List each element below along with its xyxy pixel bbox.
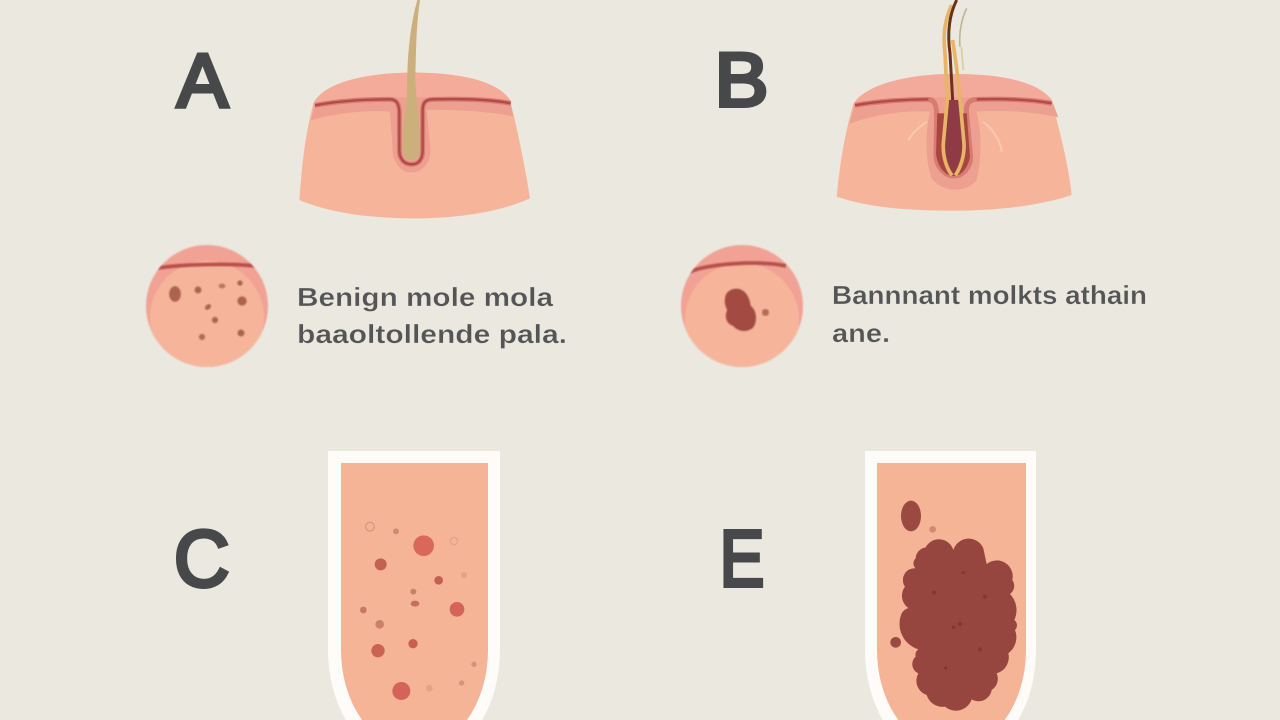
text: benign description	[297, 282, 567, 349]
illustration: skin panel E with large irregular lesion	[865, 451, 1036, 720]
letter E: E	[720, 514, 764, 603]
text: malignant description	[832, 280, 1147, 348]
text: malignant description: ane.	[832, 318, 890, 348]
letter C: C	[174, 514, 230, 603]
illustration: skin panel C with scattered spots	[328, 451, 500, 720]
illustration: skin cross-section B with dark hair	[837, 0, 1072, 211]
icon: benign mole circle	[146, 245, 268, 375]
text: benign description: baaoltollende pala.	[297, 319, 567, 349]
letter B: B	[714, 38, 768, 123]
text: malignant description: Bannnant molkts athain	[832, 280, 1147, 310]
icon: malignant mole circle	[681, 245, 803, 377]
text: benign description: Benign mole mola	[297, 282, 554, 312]
illustration: skin cross-section A with hair	[299, 0, 530, 218]
letter A: A	[177, 39, 228, 124]
